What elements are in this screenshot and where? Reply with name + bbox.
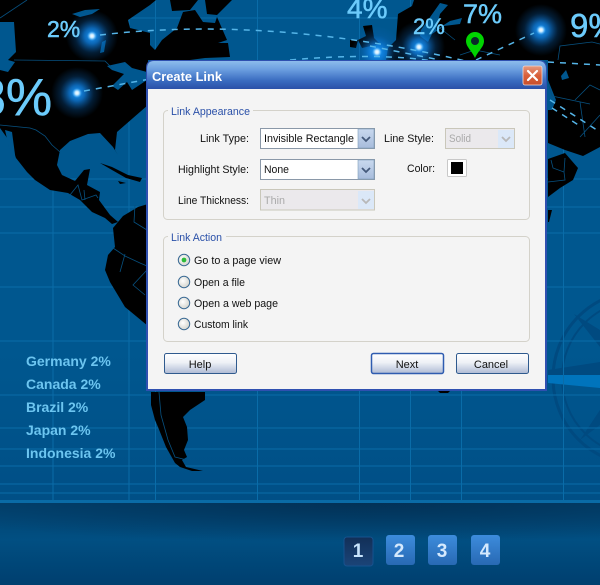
- map: North and Central America: [0, 0, 232, 224]
- radio: Custom link: Custom link: [194, 319, 248, 331]
- country percentage list: Brazil 2%: [26, 399, 89, 415]
- line style dropdown: Solid: [449, 133, 471, 145]
- radio: Open a file: Open a file: [194, 277, 245, 289]
- link type dropdown: Invisible Rectangle: [264, 133, 354, 145]
- highlight style dropdown: [260, 160, 374, 180]
- button: Next: Next: [396, 359, 418, 371]
- page button 4: 4: [480, 541, 491, 562]
- icon: green map pin: [466, 32, 484, 58]
- page button 3: [428, 535, 457, 565]
- button: Help: [164, 354, 236, 374]
- percent labels: [0, 0, 600, 127]
- percent labels: 2%: [413, 14, 445, 39]
- light glow spots: [51, 4, 567, 119]
- dialog: Create Link: [146, 60, 547, 391]
- button: Help: Help: [189, 359, 211, 371]
- panel: Link Appearance: Line Style:: [384, 133, 434, 145]
- map: South America: [105, 204, 450, 471]
- color swatch: [448, 160, 466, 176]
- page buttons: [344, 535, 500, 566]
- panel: Link Appearance: Link Appearance: [171, 106, 250, 118]
- icon: compass rose: [548, 291, 600, 465]
- country percentage list: [26, 353, 116, 461]
- dialog title bar: Create Link: [152, 69, 223, 84]
- button: Next: [372, 354, 444, 374]
- page button 2: [386, 535, 415, 565]
- button: Cancel: Cancel: [474, 359, 508, 371]
- line thickness dropdown: Thin: [264, 195, 285, 207]
- panel: Link Appearance: [164, 106, 530, 220]
- highlight style dropdown: None: [264, 164, 289, 176]
- link type dropdown: [260, 128, 374, 148]
- page button 2: 2: [394, 541, 404, 562]
- close button: [523, 66, 542, 85]
- dashed flight paths: [84, 29, 600, 132]
- bottom navigation band: [0, 500, 600, 585]
- panel: Link Appearance: Highlight Style:: [178, 164, 249, 176]
- percent labels: 2%: [47, 16, 80, 42]
- panel: Link Appearance: Link Type:: [200, 133, 249, 145]
- dialog title bar: [147, 61, 546, 89]
- panel: Link Action: Link Action: [171, 232, 222, 244]
- country percentage list: Canada 2%: [26, 376, 101, 392]
- country percentage list: Germany 2%: [26, 353, 111, 369]
- country percentage list: Japan 2%: [26, 422, 91, 438]
- page button 3: 3: [437, 541, 447, 562]
- page button 1: [344, 537, 373, 566]
- panel: Link Appearance: Line Thickness:: [178, 195, 249, 207]
- page button 4: [471, 535, 500, 565]
- line style dropdown: [446, 128, 514, 148]
- line thickness dropdown: [260, 190, 374, 210]
- country percentage list: Indonesia 2%: [26, 445, 116, 461]
- page button 1: 1: [353, 541, 364, 562]
- radio: Open a web page: Open a web page: [194, 298, 278, 310]
- map: Europe, Russia and Asia: [350, 0, 600, 222]
- panel: Link Action: [164, 232, 530, 342]
- panel: Link Appearance: Color:: [407, 163, 435, 175]
- radio: Go to a page view: Go to a page view: [194, 255, 281, 267]
- button: Cancel: [456, 354, 528, 374]
